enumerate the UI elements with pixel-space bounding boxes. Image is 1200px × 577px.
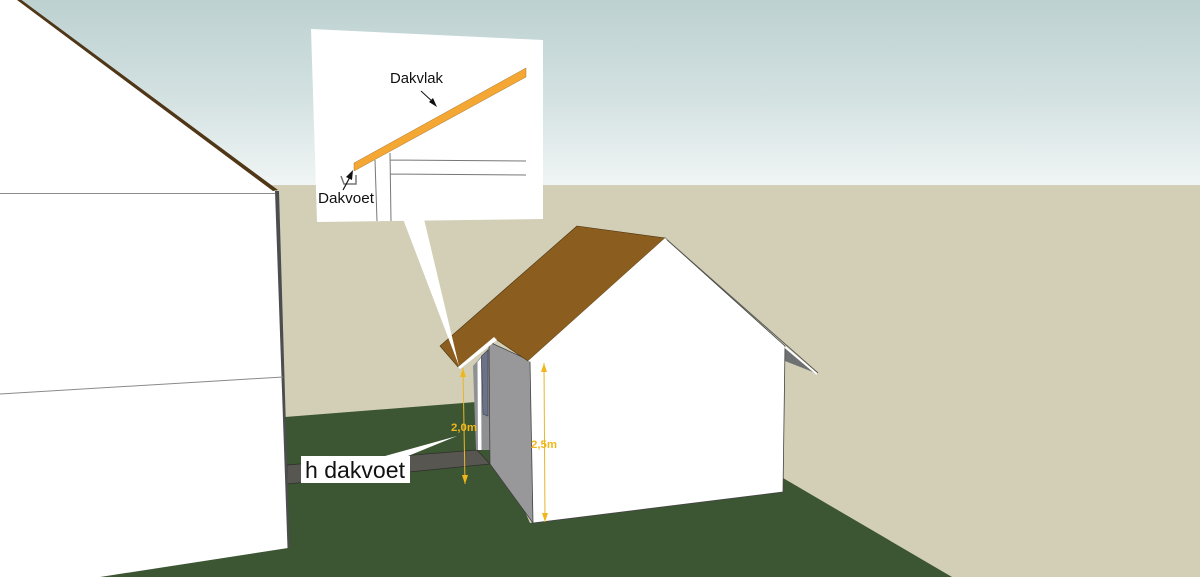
entrance wall	[473, 342, 494, 450]
lawn	[90, 402, 952, 577]
building roof edge	[17, 0, 278, 191]
eave top line	[665, 238, 818, 373]
white door post	[478, 358, 482, 450]
label box	[301, 456, 410, 483]
callout panel: roof detail	[311, 29, 543, 366]
wall and beam lines	[375, 153, 526, 221]
label: Dakvlak: Dakvlak	[390, 71, 444, 87]
building floor lines	[0, 194, 283, 394]
dimension: 2,0m	[451, 368, 477, 484]
callout pointer	[403, 219, 459, 366]
value 2,5m: 2,5m	[531, 439, 557, 451]
side wall	[489, 342, 533, 523]
large building	[0, 0, 290, 577]
callout card	[311, 29, 543, 222]
roof fascia	[528, 238, 667, 362]
eave fascia	[458, 337, 497, 369]
label pointer	[385, 436, 457, 456]
window	[482, 350, 488, 416]
foot angle symbol	[341, 175, 356, 184]
path	[287, 450, 490, 484]
label: Dakvoet: Dakvoet	[318, 191, 374, 207]
back eave soffit	[785, 346, 818, 374]
building wall	[0, 0, 288, 577]
front wall and gable	[530, 238, 785, 523]
sky	[0, 0, 1200, 185]
arrow to roof plane	[421, 91, 437, 107]
roof	[440, 226, 665, 367]
arrow to roof foot	[343, 170, 353, 190]
small house	[440, 226, 818, 523]
dimension: 2,5m	[531, 363, 557, 522]
label: h dakvoet	[301, 436, 457, 483]
building side edge	[275, 191, 290, 548]
ground plane	[0, 185, 1200, 577]
value 2,0m: 2,0m	[451, 422, 477, 434]
label text: h dakvoet	[305, 457, 406, 483]
eave white edge	[785, 347, 817, 374]
roof plane	[354, 68, 526, 171]
